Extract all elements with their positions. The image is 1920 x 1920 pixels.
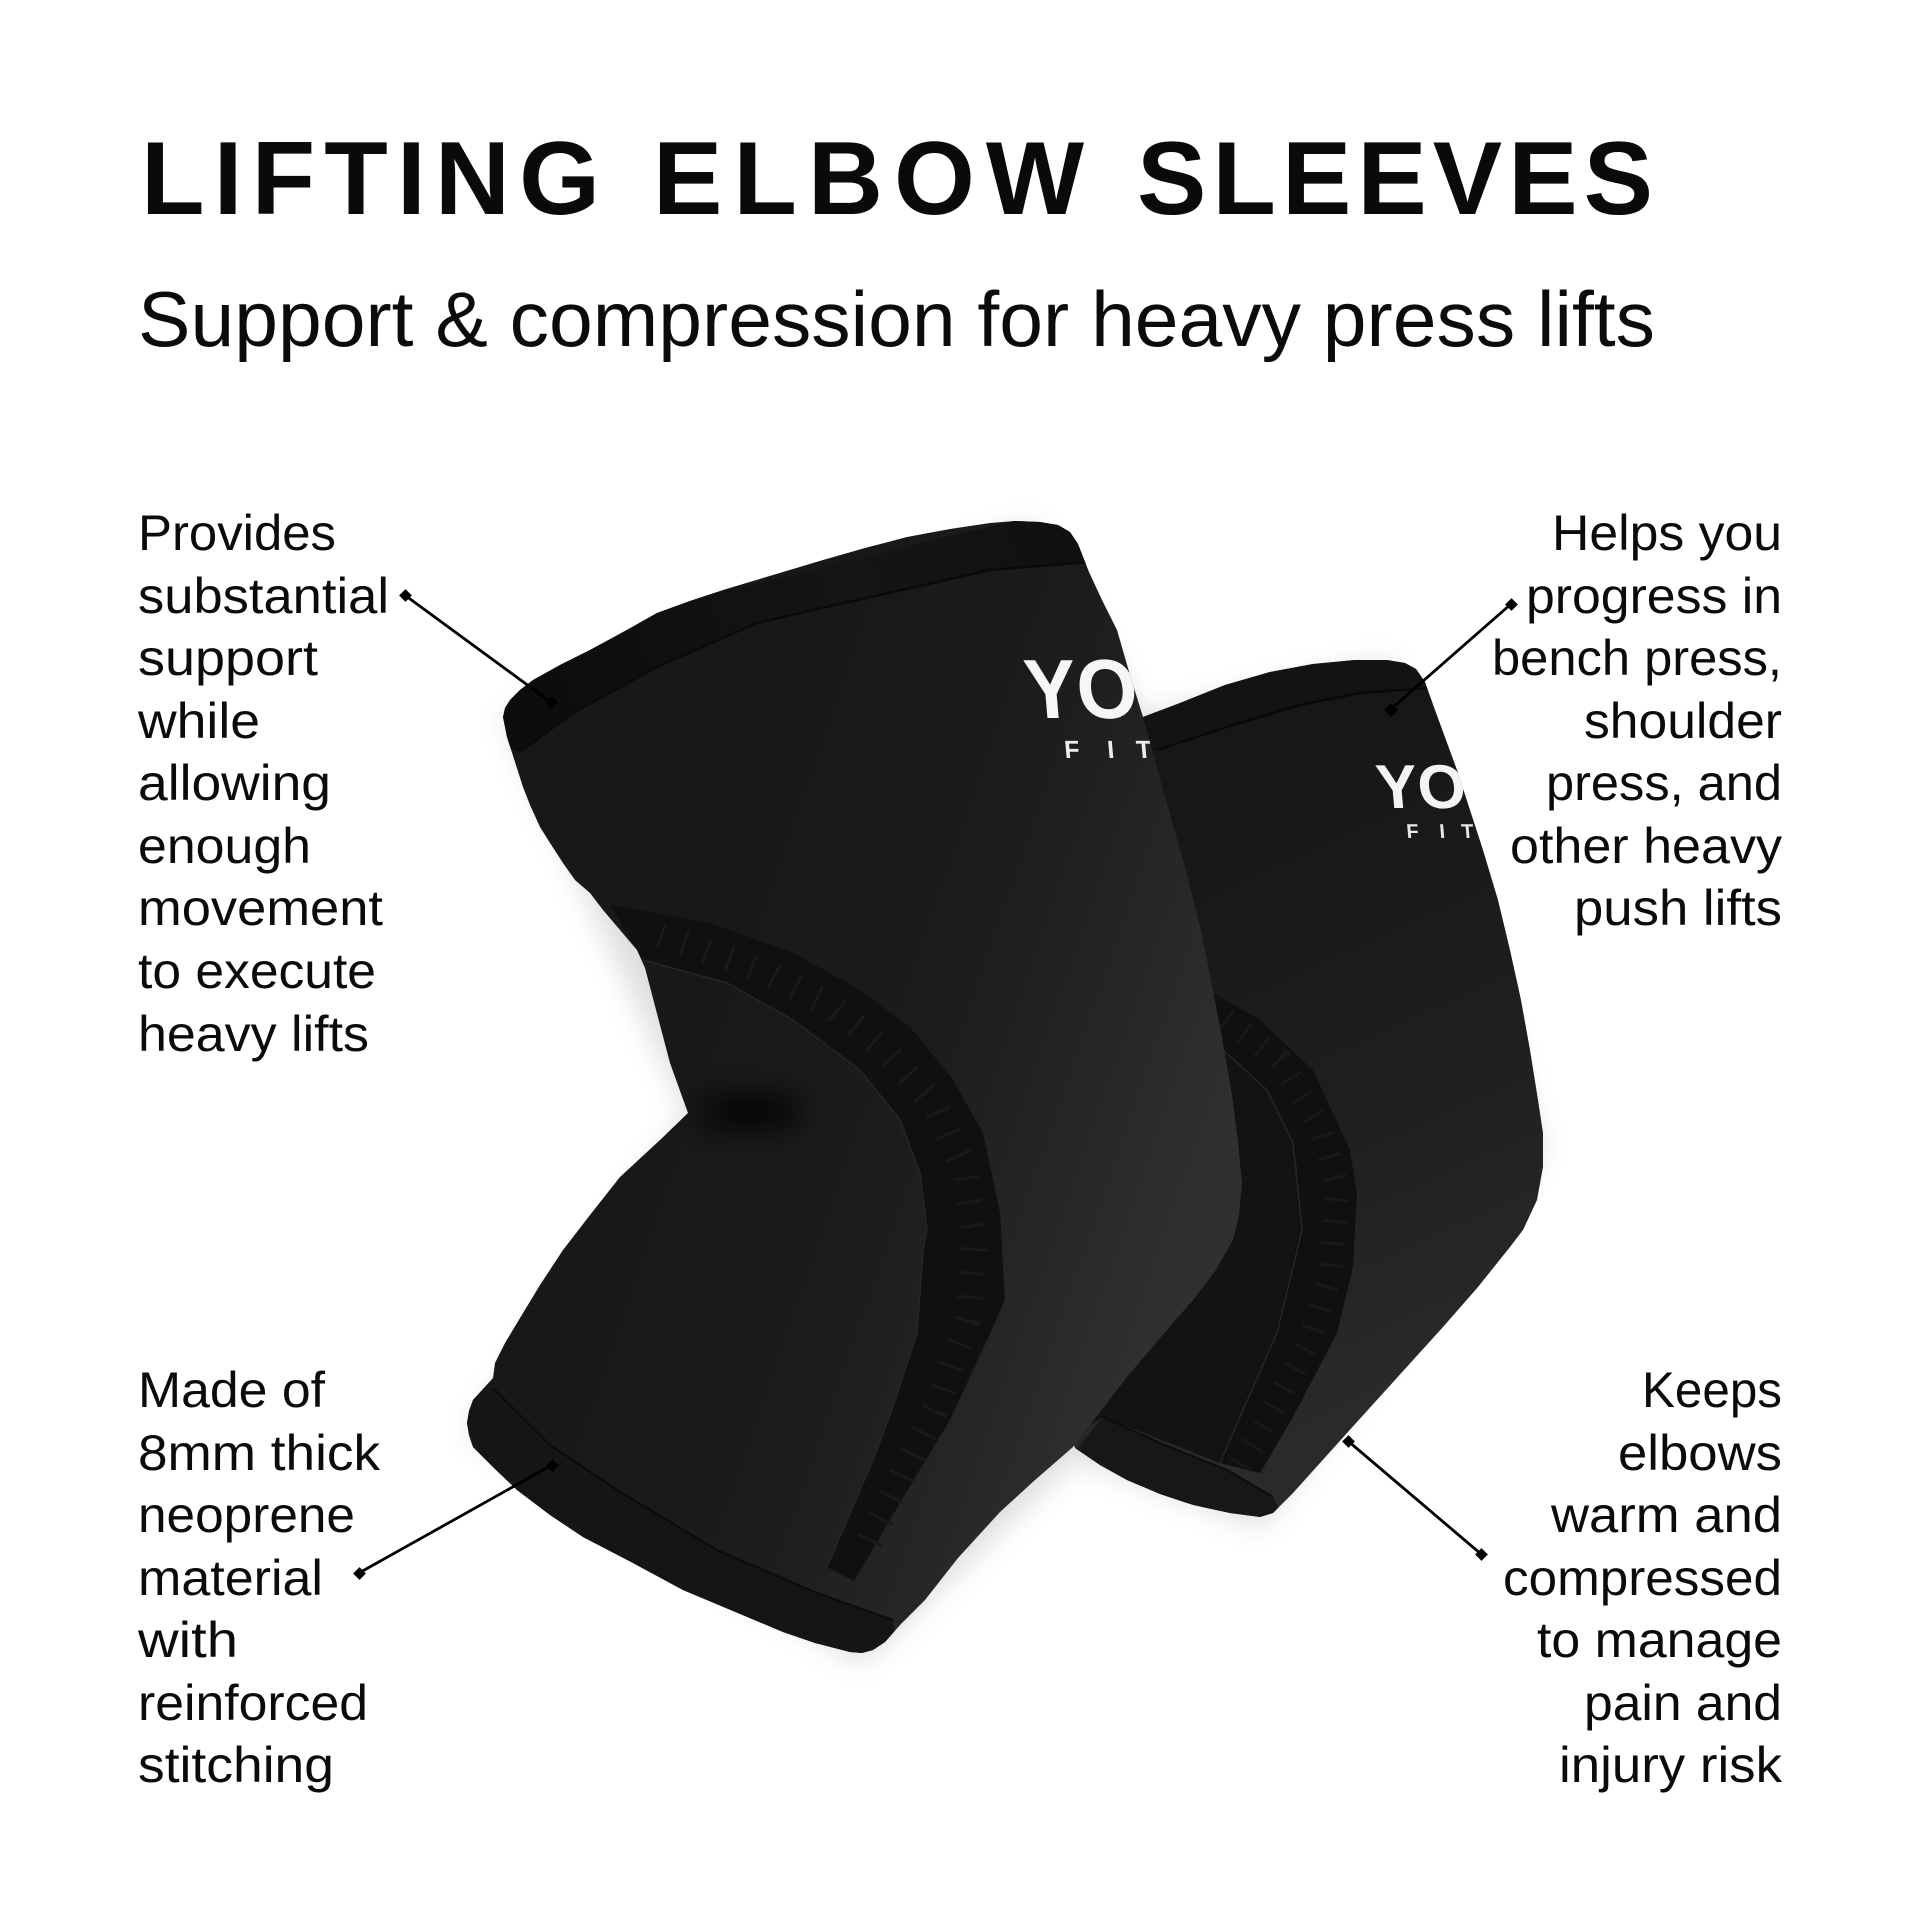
text block: support (top left): support xyxy=(138,630,318,686)
back sleeve inner pocket panel xyxy=(1090,1054,1298,1463)
text block: material (bottom left): material xyxy=(138,1550,323,1606)
back sleeve zigzag stitching xyxy=(1225,1020,1338,1465)
text block: progress (top right): progress in xyxy=(1526,568,1782,624)
text block: warmth (bottom right): pain and xyxy=(1584,1675,1782,1731)
text block: progress (top right): bench press, xyxy=(1492,630,1782,686)
front sleeve logo: FIT xyxy=(1063,736,1153,764)
arrow: warmth callout xyxy=(1342,1435,1488,1561)
text block: warmth (bottom right): to manage xyxy=(1537,1612,1782,1668)
text block: support (top left): enough xyxy=(138,818,311,874)
arrow: material callout xyxy=(353,1459,559,1580)
back sleeve logo: FIT xyxy=(1406,821,1475,843)
arrow: support callout xyxy=(399,589,558,709)
text block: progress (top right): shoulder xyxy=(1584,693,1782,749)
back sleeve bottom hem xyxy=(1076,1418,1278,1517)
text block: material (bottom left) xyxy=(137,1362,381,1793)
text block: support (top left): Provides xyxy=(138,505,336,561)
text block: progress (top right): other heavy xyxy=(1510,818,1782,874)
front sleeve logo xyxy=(1023,659,1150,758)
arrow: progress callout xyxy=(1384,598,1518,717)
back sleeve logo: YOU xyxy=(1373,753,1514,822)
text block: progress (top right) xyxy=(1492,505,1782,936)
title: SLEEVES xyxy=(1137,121,1653,237)
text block: support (top left): allowing xyxy=(138,755,331,811)
text block: warmth (bottom right): compressed xyxy=(1503,1550,1782,1606)
text block: warmth (bottom right): warm and xyxy=(1550,1487,1782,1543)
front sleeve side seam band xyxy=(610,905,1005,1581)
text block: support (top left) xyxy=(137,505,389,1062)
title: LIFTING xyxy=(141,121,600,237)
text block: progress (top right): press, and xyxy=(1546,755,1782,811)
soft shadow behind sleeves xyxy=(467,522,1543,1663)
text block: material (bottom left): neoprene xyxy=(138,1487,355,1543)
back sleeve xyxy=(1074,660,1543,1517)
text block: warmth (bottom right): injury risk xyxy=(1559,1737,1783,1793)
product image: pair of elbow sleeves xyxy=(440,500,1543,1680)
text block: support (top left): to execute xyxy=(138,943,376,999)
front sleeve inner elbow dark crease xyxy=(695,1097,805,1127)
front sleeve logo: YOU xyxy=(1020,643,1198,737)
text block: material (bottom left): reinforced xyxy=(138,1675,368,1731)
back sleeve side seam band xyxy=(1214,994,1357,1473)
text block: support (top left): movement xyxy=(138,880,383,936)
back sleeve top hem xyxy=(1143,660,1428,717)
text block: warmth (bottom right) xyxy=(1503,1362,1783,1793)
text block: warmth (bottom right): elbows xyxy=(1618,1425,1782,1481)
text block: warmth (bottom right): Keeps xyxy=(1642,1362,1782,1418)
text block: material (bottom left): 8mm thick xyxy=(138,1425,381,1481)
text block: support (top left): substantial xyxy=(138,568,389,624)
text block: material (bottom left): Made of xyxy=(138,1362,325,1418)
front sleeve top hem xyxy=(503,521,1086,752)
text block: progress (top right): Helps you xyxy=(1552,505,1782,561)
text block: support (top left): heavy lifts xyxy=(138,1006,369,1062)
title xyxy=(141,121,1653,237)
text block: support (top left): while xyxy=(137,693,260,749)
title: ELBOW xyxy=(653,121,1085,237)
back sleeve logo xyxy=(1375,764,1473,838)
front sleeve bottom hem xyxy=(467,1388,894,1653)
front sleeve zigzag stitching xyxy=(660,935,975,1560)
text block: material (bottom left): with xyxy=(137,1612,238,1668)
subtitle: Support & compression for heavy press lifts xyxy=(138,275,1655,363)
text block: progress (top right): push lifts xyxy=(1574,880,1782,936)
front sleeve xyxy=(440,500,1242,1680)
text block: material (bottom left): stitching xyxy=(138,1737,334,1793)
